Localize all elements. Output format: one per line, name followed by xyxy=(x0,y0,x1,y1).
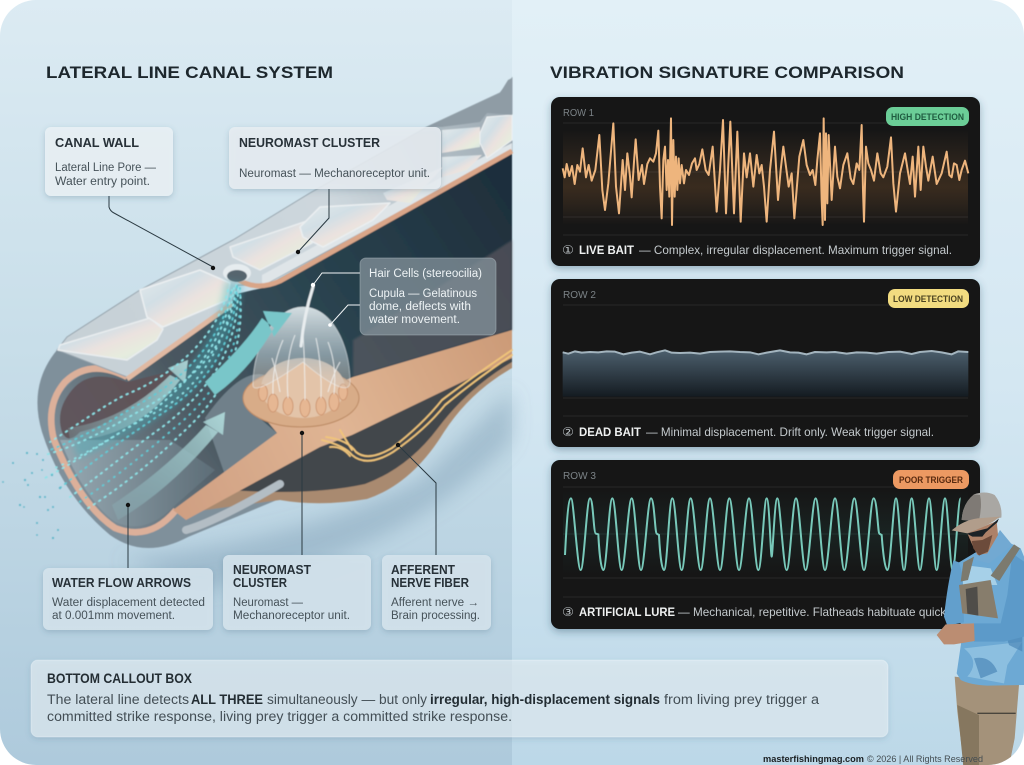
footer credit xyxy=(763,754,983,765)
leader: afferent nerve xyxy=(396,443,436,555)
flow arrow 1 xyxy=(68,360,188,440)
panel: row 3 artificial lure: ROW 3 xyxy=(563,470,596,482)
badge: poor trigger xyxy=(893,470,969,489)
callout: bottom callout box: irregular, high-displacement signals xyxy=(430,692,660,707)
callout: afferent nerve fiber: Brain processing. xyxy=(391,610,480,622)
caption: artificial lure: — Mechanical, repetitive. Flatheads habituate quickly. xyxy=(678,605,957,619)
waveform: live bait xyxy=(563,118,968,225)
scale 7 xyxy=(442,155,482,177)
callout: water flow arrows xyxy=(43,568,213,630)
title: lateral line canal system: LATERAL LINE CANAL SYSTEM xyxy=(46,63,333,82)
tan lower wall xyxy=(173,330,512,520)
vest straps xyxy=(961,544,1020,582)
lower tan edge of upper wall xyxy=(127,304,232,379)
callout: canal wall: CANAL WALL xyxy=(55,136,139,150)
background: left panel xyxy=(0,0,512,765)
shirt torso xyxy=(957,538,1024,686)
callout: canal wall xyxy=(45,127,173,196)
arm right xyxy=(974,553,1024,642)
cap crown xyxy=(962,492,1002,521)
callout: afferent nerve fiber: AFFERENT xyxy=(391,563,455,577)
waveform: artificial lure xyxy=(565,498,961,570)
callout: bottom callout box: BOTTOM CALLOUT BOX xyxy=(47,671,192,686)
callout: hair cells and cupula: Hair Cells (stereocilia) xyxy=(369,268,482,280)
badge: low detection: LOW DETECTION xyxy=(893,294,963,304)
neuromast mass xyxy=(261,358,345,418)
hands xyxy=(937,623,975,644)
flow arrow 2 xyxy=(112,412,225,520)
scattered droplets xyxy=(2,452,61,539)
panel: row 2 dead bait xyxy=(551,279,980,447)
callout: afferent nerve fiber: Afferent nerve → xyxy=(391,597,479,609)
background: right panel xyxy=(512,0,1024,765)
grey hump xyxy=(205,374,277,475)
leader: water flow xyxy=(126,503,130,568)
footer credit: © 2026 | All Rights Reserved xyxy=(867,754,983,765)
lower bulge bottom xyxy=(204,362,513,510)
caption: live bait: LIVE BAIT xyxy=(579,243,635,257)
scale 1 xyxy=(58,318,163,360)
pale upper strip xyxy=(262,143,512,286)
cupula dome xyxy=(253,307,350,388)
callout: canal wall: Lateral Line Pore — xyxy=(55,162,156,174)
callout: hair cells and cupula xyxy=(360,258,496,335)
scale 4 xyxy=(300,203,390,247)
deflection needle xyxy=(301,287,313,346)
callout: bottom callout box: The lateral line detects xyxy=(47,692,189,707)
illustration: lateral line canal cross-section xyxy=(2,78,512,590)
stereocilia xyxy=(272,332,340,400)
canal interior xyxy=(53,150,512,533)
callout: water flow arrows: WATER FLOW ARROWS xyxy=(52,576,191,590)
waveform: dead bait xyxy=(563,350,968,397)
chest pack xyxy=(959,580,998,618)
water particles xyxy=(45,285,241,510)
caption: artificial lure xyxy=(562,605,957,619)
flow arrow 3 xyxy=(205,311,292,395)
caption: artificial lure: ARTIFICIAL LURE xyxy=(579,605,675,619)
panel: row 1 live bait xyxy=(551,97,980,266)
figure: fisherman xyxy=(937,492,1024,765)
leader: neuromast cluster upper xyxy=(296,189,329,254)
callout: afferent nerve fiber xyxy=(382,555,491,630)
shirt mottling xyxy=(964,642,1022,683)
callout: afferent nerve fiber: NERVE FIBER xyxy=(391,576,469,590)
opening mauve shade xyxy=(60,370,176,438)
water stream glow xyxy=(75,282,234,450)
lower lip xyxy=(186,484,280,530)
neuromast base disc xyxy=(243,369,359,427)
top grey scale xyxy=(427,78,512,127)
hair cells xyxy=(258,384,348,417)
gaiter xyxy=(974,530,1012,563)
scale 2 xyxy=(140,270,230,327)
callout: water flow arrows: at 0.001mm movement. xyxy=(52,610,175,622)
caption: live bait: — Complex, irregular displacement. Maximum trigger signal. xyxy=(639,243,952,257)
scale 6 xyxy=(442,127,480,153)
leader: neuromast cluster lower xyxy=(300,431,304,555)
lower bulge dark xyxy=(230,357,512,492)
callout: bottom callout box xyxy=(31,660,888,737)
caption: dead bait: DEAD BAIT xyxy=(579,425,642,439)
upper wall xyxy=(57,78,512,377)
callout: water flow arrows: Water displacement detected xyxy=(52,597,205,609)
arm left xyxy=(944,560,964,626)
rim xyxy=(51,369,176,532)
scale 8 xyxy=(480,115,512,158)
callout: bottom callout box: ALL THREE xyxy=(191,692,263,707)
leader: cupula xyxy=(328,305,360,327)
panel: row 1 live bait: ROW 1 xyxy=(563,107,594,119)
right wall shade xyxy=(353,240,512,377)
leader: hair cells xyxy=(311,273,360,287)
pants xyxy=(955,677,1019,765)
caption: dead bait: — Minimal displacement. Drift only. Weak trigger signal. xyxy=(646,425,934,439)
footer credit: masterfishingmag.com xyxy=(763,754,864,765)
callout: neuromast cluster lower: Neuromast — xyxy=(233,597,303,609)
badge: low detection xyxy=(888,289,969,308)
callout: bottom callout box: committed strike response, living prey trigger a committed strike response. xyxy=(47,709,512,724)
panel: row 3 artificial lure xyxy=(551,460,980,629)
scale 5 xyxy=(383,167,443,203)
pore xyxy=(223,264,251,282)
callout: hair cells and cupula: Cupula — Gelatinous xyxy=(369,288,477,300)
callout: neuromast cluster lower: CLUSTER xyxy=(233,576,287,590)
sunglasses xyxy=(967,518,999,537)
cap brim xyxy=(952,517,1000,533)
callout: bottom callout box: from living prey trigger a xyxy=(664,692,820,707)
badge: poor trigger: POOR TRIGGER xyxy=(899,475,963,485)
caption: artificial lure: ③ xyxy=(562,605,574,619)
title: vibration signature comparison: VIBRATION SIGNATURE COMPARISON xyxy=(550,63,904,82)
callout: neuromast cluster upper: NEUROMAST CLUSTER xyxy=(239,136,380,150)
callout: hair cells and cupula: water movement. xyxy=(368,314,460,326)
afferent nerve fiber xyxy=(322,350,512,461)
face xyxy=(967,521,998,555)
panel: row 2 dead bait: ROW 2 xyxy=(563,289,596,301)
callout: bottom callout box: simultaneously — but only xyxy=(267,692,427,707)
callout: neuromast cluster lower: NEUROMAST xyxy=(233,563,311,577)
lower opening floor xyxy=(60,440,215,526)
badge: high detection xyxy=(886,107,969,126)
outer shell xyxy=(37,350,284,548)
leader: canal wall xyxy=(109,196,215,270)
callout: neuromast cluster lower xyxy=(223,555,371,630)
callout: hair cells and cupula: dome, deflects with xyxy=(369,301,471,313)
soft shadow under tube xyxy=(120,390,512,590)
badge: high detection: HIGH DETECTION xyxy=(891,112,964,122)
caption: dead bait: ② xyxy=(562,425,574,439)
callout: neuromast cluster upper: Neuromast — Mechanoreceptor unit. xyxy=(239,168,430,180)
caption: live bait: ① xyxy=(562,243,574,257)
scale 3 xyxy=(230,220,312,270)
callout: canal wall: Water entry point. xyxy=(55,176,150,188)
callout: neuromast cluster upper xyxy=(229,127,441,189)
beard xyxy=(972,535,992,556)
callout: neuromast cluster lower: Mechanoreceptor unit. xyxy=(233,610,350,622)
